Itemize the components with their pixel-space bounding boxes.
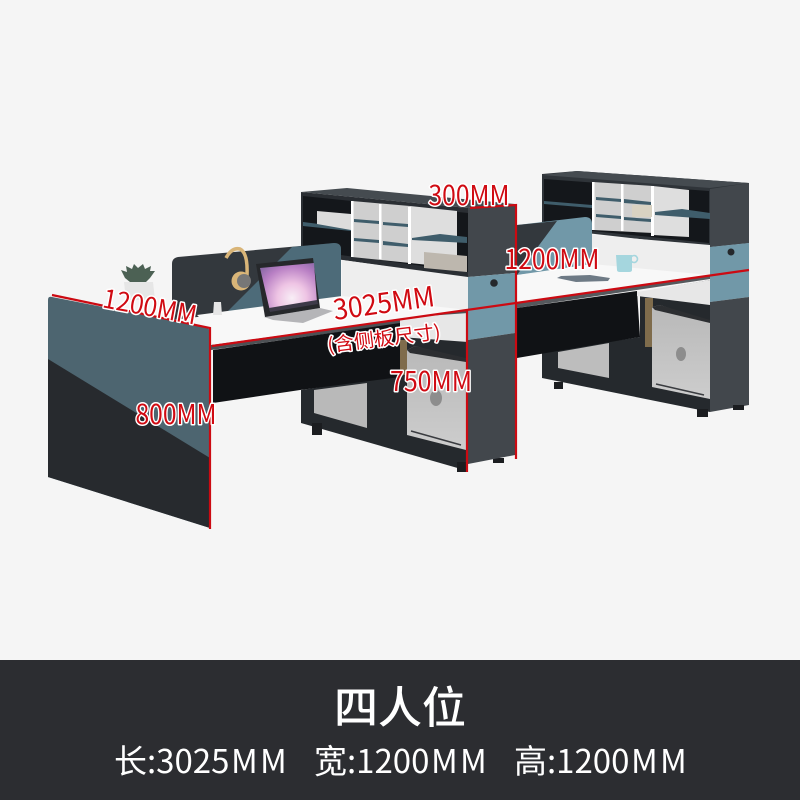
left desktop xyxy=(197,296,468,345)
footer dimension: width: 宽:1200 xyxy=(314,735,429,783)
mug xyxy=(616,255,638,272)
right drawer xyxy=(637,280,710,305)
footer title: 四人位 xyxy=(334,672,466,736)
right workstation xyxy=(517,171,749,417)
right computer tall xyxy=(652,305,710,399)
footer dimension: height: M xyxy=(660,735,687,783)
headphones xyxy=(226,249,251,290)
left computer tall xyxy=(407,346,466,450)
centre tower xyxy=(468,204,515,464)
right desk screen xyxy=(517,217,592,275)
right back panel xyxy=(592,235,710,275)
footer dimension: width: M xyxy=(460,735,487,783)
left feet xyxy=(312,423,504,472)
label: length 3025MM: 3025MM xyxy=(330,275,437,329)
laptop xyxy=(256,258,333,323)
right computer small xyxy=(558,343,609,378)
label: total height 1200MM: 1200MM xyxy=(504,238,600,277)
label: desk height 750MM: 750MM xyxy=(390,360,472,399)
right tower xyxy=(710,183,749,247)
left drawer xyxy=(400,313,468,342)
left back panel xyxy=(342,260,468,310)
left apron xyxy=(213,323,400,403)
left side panel xyxy=(48,297,210,528)
label: includes side panel note: (含侧板尺寸) xyxy=(326,317,442,358)
left desk screen xyxy=(172,243,341,320)
right lock xyxy=(728,248,734,256)
label: hutch depth 300MM: 300MM xyxy=(428,174,510,213)
right tan strip xyxy=(645,298,653,347)
left computer small xyxy=(314,383,367,428)
plant xyxy=(121,264,155,300)
right desktop xyxy=(517,264,710,303)
right lower cabinet xyxy=(542,280,710,412)
right feet xyxy=(554,382,744,417)
footer dimension: length: M xyxy=(260,735,287,783)
right hutch xyxy=(542,171,749,247)
footer dimension: width: M xyxy=(431,735,458,783)
left tan strip xyxy=(400,340,407,375)
right apron xyxy=(517,291,640,358)
footer dimension: height: 高:1200 xyxy=(514,735,629,783)
red dimension lines xyxy=(52,205,749,529)
footer band xyxy=(0,660,800,800)
left lower cabinet xyxy=(301,320,468,471)
desk holder xyxy=(213,302,222,315)
tablet xyxy=(557,275,610,282)
label: side height 800MM: 800MM xyxy=(136,393,216,432)
footer dimension: height: M xyxy=(631,735,658,783)
label: side depth 1200MM: 1200MM xyxy=(100,279,200,332)
footer dimension: length: M xyxy=(231,735,258,783)
footer dimension: length: 长:3025 xyxy=(114,735,229,783)
left workstation rear xyxy=(172,188,515,472)
left hutch xyxy=(301,188,515,278)
